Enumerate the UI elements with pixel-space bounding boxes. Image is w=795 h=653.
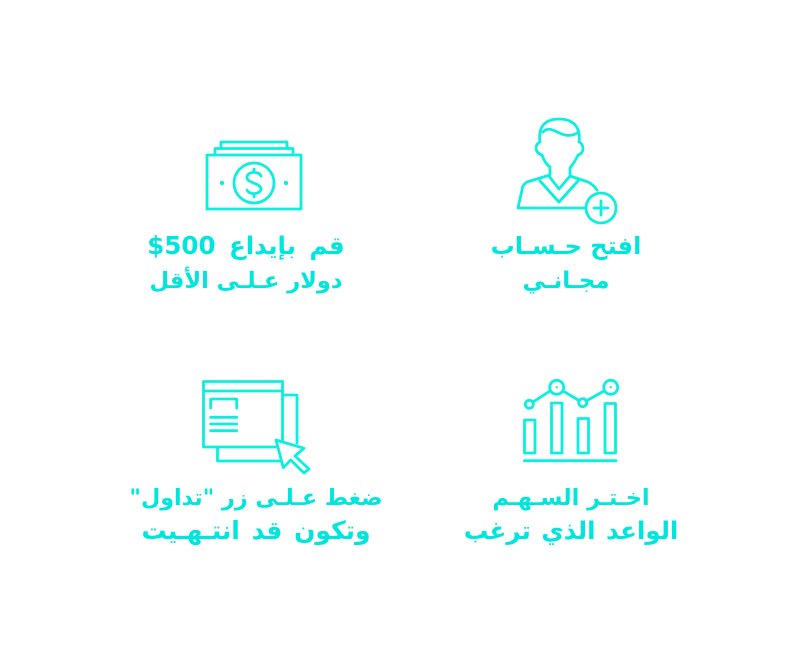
panel: deposit bbox=[147, 140, 345, 294]
panel: open account bbox=[491, 118, 641, 294]
heading: choose the stock: الواعد الذي ترغب bbox=[464, 516, 678, 545]
icon: banknotes bbox=[206, 140, 302, 210]
heading: open a free account: مجـانـي bbox=[522, 268, 610, 294]
heading: choose the stock bbox=[464, 485, 678, 545]
heading: press trade: وتكون قد انتـهـيت bbox=[141, 516, 371, 544]
heading: open a free account: افتح حـسـاب bbox=[491, 232, 641, 260]
icon: person with plus bbox=[516, 118, 618, 224]
icon: bar and line chart bbox=[523, 378, 620, 462]
heading: press trade: ضغط عـلـى زر "تداول" bbox=[129, 485, 383, 511]
heading: deposit $500 bbox=[147, 231, 345, 294]
panel: choose stock bbox=[464, 378, 678, 545]
icon: windows with cursor bbox=[202, 380, 310, 474]
heading: deposit $500: قم بإيداع $500 bbox=[147, 231, 345, 260]
panel: click trade bbox=[129, 380, 383, 546]
heading: deposit $500: دولار عـلـى الأقل bbox=[150, 268, 342, 294]
heading: press trade bbox=[129, 485, 383, 546]
heading: open a free account bbox=[491, 232, 641, 294]
heading: choose the stock: اخـتـر السـهـم bbox=[492, 485, 650, 511]
